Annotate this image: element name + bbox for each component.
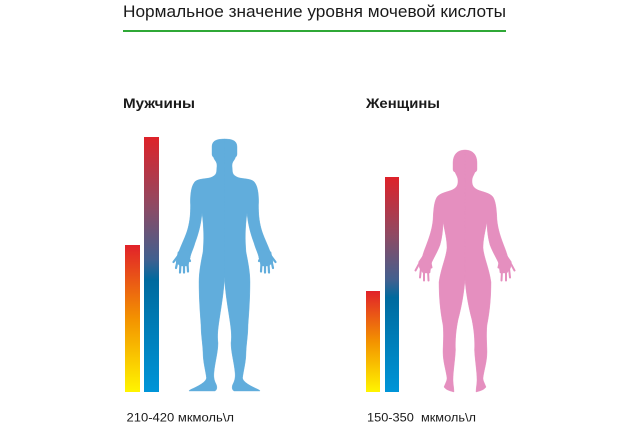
title underline xyxy=(123,30,506,32)
bar: women lower value 150 xyxy=(366,291,380,392)
bar chart: women xyxy=(366,177,399,392)
icon: male body silhouette xyxy=(174,139,276,391)
label: men range: 210-420 мкмоль\л xyxy=(126,410,234,424)
heading: women: Женщины xyxy=(365,95,440,111)
title: Нормальное значение уровня мочевой кислоты xyxy=(123,3,506,21)
bar: men lower value 210 xyxy=(125,245,140,392)
icon: female body silhouette xyxy=(416,150,514,392)
bar chart: men xyxy=(125,137,159,392)
bar: women upper value 350 xyxy=(385,177,399,392)
bar: men upper value 420 xyxy=(144,137,159,392)
heading: men: Мужчины xyxy=(123,95,195,111)
label: women range: 150-350 мкмоль\л xyxy=(367,410,476,424)
